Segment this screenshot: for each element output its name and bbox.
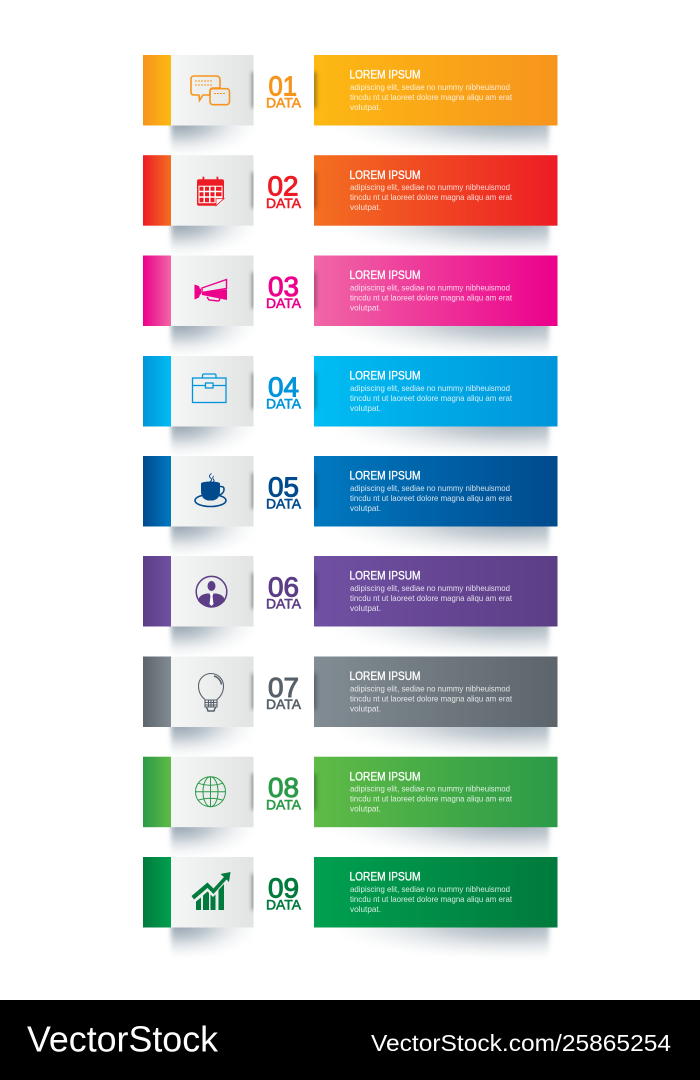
body text xyxy=(350,784,513,814)
row 07 xyxy=(143,656,558,758)
text banner xyxy=(312,757,558,827)
colour tab xyxy=(143,857,171,928)
label DATA: DATA xyxy=(266,496,302,512)
body text: adipiscing elit, sediae no nummy nibheuismod xyxy=(350,82,510,92)
row 03 xyxy=(143,256,558,356)
left card shadow xyxy=(171,822,255,858)
footer bar xyxy=(0,1000,700,1080)
heading: LOREM IPSUM xyxy=(350,771,420,783)
icon card xyxy=(171,757,256,827)
left card shadow xyxy=(171,922,255,958)
body text xyxy=(350,282,513,312)
row 09 xyxy=(143,857,558,958)
left card shadow xyxy=(171,320,255,356)
colour tab xyxy=(143,155,171,226)
body text: adipiscing elit, sediae no nummy nibheuismod xyxy=(350,483,510,493)
right banner shadow xyxy=(330,120,549,156)
body text xyxy=(350,383,513,413)
colour tab xyxy=(143,456,171,526)
body text xyxy=(350,82,513,112)
colour tab xyxy=(143,256,171,326)
number 09: 09 xyxy=(268,872,299,904)
row 02 xyxy=(143,155,558,256)
left card shadow xyxy=(171,521,255,557)
heading: LOREM IPSUM xyxy=(350,270,420,282)
heading: LOREM IPSUM xyxy=(350,371,420,383)
icon: megaphone xyxy=(194,280,227,301)
label DATA: DATA xyxy=(266,796,302,812)
label DATA: DATA xyxy=(266,95,302,111)
text banner xyxy=(312,556,558,626)
icon card xyxy=(171,656,256,727)
colour tab xyxy=(143,55,171,126)
icon: calendar xyxy=(197,177,224,206)
label DATA: DATA xyxy=(266,295,302,311)
heading: LOREM IPSUM xyxy=(350,471,420,483)
number 01: 01 xyxy=(268,70,297,102)
body text: volutpat. xyxy=(350,403,381,413)
number 08: 08 xyxy=(268,772,299,803)
label DATA: DATA xyxy=(266,897,302,913)
footer logo text: VectorStock xyxy=(27,1018,219,1060)
body text: adipiscing elit, sediae no nummy nibheuismod xyxy=(350,182,510,192)
row 08 xyxy=(143,757,558,858)
icon card xyxy=(171,556,256,626)
body text: tincdu nt ut laoreet dolore magna aliqu am erat xyxy=(350,393,513,403)
icon: briefcase xyxy=(192,374,226,402)
icon: growth chart xyxy=(192,872,230,910)
left card shadow xyxy=(171,621,255,657)
body text: adipiscing elit, sediae no nummy nibheuismod xyxy=(350,383,510,393)
icon card xyxy=(171,256,256,326)
body text: adipiscing elit, sediae no nummy nibheuismod xyxy=(350,583,510,593)
body text: volutpat. xyxy=(350,704,381,714)
number 03: 03 xyxy=(268,271,299,302)
number 06: 06 xyxy=(268,572,299,602)
body text xyxy=(350,884,513,914)
body text xyxy=(350,182,513,212)
body text: tincdu nt ut laoreet dolore magna aliqu am erat xyxy=(350,894,513,904)
icon card xyxy=(171,55,256,126)
number 05: 05 xyxy=(268,472,299,502)
footer image id: VectorStock.com/25865254 xyxy=(371,1030,671,1056)
body text: volutpat. xyxy=(350,302,381,312)
text banner xyxy=(312,256,558,326)
body text xyxy=(350,684,513,714)
left card shadow xyxy=(171,120,255,156)
label DATA: DATA xyxy=(266,696,302,712)
text banner xyxy=(312,456,558,526)
body text: adipiscing elit, sediae no nummy nibheuismod xyxy=(350,684,510,694)
heading: LOREM IPSUM xyxy=(350,571,420,583)
body text: tincdu nt ut laoreet dolore magna aliqu am erat xyxy=(350,694,513,704)
right banner shadow xyxy=(330,722,549,758)
heading: LOREM IPSUM xyxy=(350,70,420,82)
number 04: 04 xyxy=(268,372,299,402)
body text: adipiscing elit, sediae no nummy nibheuismod xyxy=(350,884,510,894)
right banner shadow xyxy=(330,922,549,958)
icon card xyxy=(171,356,256,426)
body text: tincdu nt ut laoreet dolore magna aliqu am erat xyxy=(350,92,513,102)
colour tab xyxy=(143,356,171,426)
right banner shadow xyxy=(330,220,549,256)
heading: LOREM IPSUM xyxy=(350,872,420,884)
icon: light bulb xyxy=(198,674,224,711)
right banner shadow xyxy=(330,822,549,858)
icon: coffee cup xyxy=(195,474,226,506)
row 05 xyxy=(143,456,558,557)
body text xyxy=(350,583,513,613)
number 02: 02 xyxy=(268,171,298,202)
text banner xyxy=(312,356,558,426)
colour tab xyxy=(143,656,171,727)
icon card xyxy=(171,155,256,226)
right banner shadow xyxy=(330,621,549,657)
text banner xyxy=(312,656,558,727)
body text xyxy=(350,483,513,513)
icon: globe xyxy=(196,777,226,807)
text banner xyxy=(312,55,558,126)
left card shadow xyxy=(171,722,255,758)
body text: tincdu nt ut laoreet dolore magna aliqu am erat xyxy=(350,192,513,202)
icon card xyxy=(171,456,256,526)
left card shadow xyxy=(171,220,255,256)
body text: tincdu nt ut laoreet dolore magna aliqu am erat xyxy=(350,794,513,804)
icon card xyxy=(171,857,256,928)
body text: volutpat. xyxy=(350,102,381,112)
body text: volutpat. xyxy=(350,603,381,613)
colour tab xyxy=(143,556,171,626)
right banner shadow xyxy=(330,320,549,356)
body text: tincdu nt ut laoreet dolore magna aliqu am erat xyxy=(350,292,513,302)
body text: volutpat. xyxy=(350,804,381,814)
body text: volutpat. xyxy=(350,503,381,513)
text banner xyxy=(312,155,558,226)
heading: LOREM IPSUM xyxy=(350,671,420,683)
label DATA: DATA xyxy=(266,596,302,612)
icon: businessman portrait xyxy=(196,576,227,607)
row 01 xyxy=(143,55,558,156)
body text: tincdu nt ut laoreet dolore magna aliqu am erat xyxy=(350,593,513,603)
row 04 xyxy=(143,356,558,457)
left card shadow xyxy=(171,421,255,457)
label DATA: DATA xyxy=(266,396,302,412)
heading: LOREM IPSUM xyxy=(350,170,420,182)
icon: chat bubbles xyxy=(191,76,230,105)
number 07: 07 xyxy=(268,672,299,703)
body text: adipiscing elit, sediae no nummy nibheuismod xyxy=(350,784,510,794)
colour tab xyxy=(143,757,171,827)
body text: tincdu nt ut laoreet dolore magna aliqu am erat xyxy=(350,493,513,503)
text banner xyxy=(314,857,558,928)
right banner shadow xyxy=(330,421,549,457)
body text: volutpat. xyxy=(350,202,381,212)
label DATA: DATA xyxy=(266,195,302,211)
body text: adipiscing elit, sediae no nummy nibheuismod xyxy=(350,282,510,292)
right banner shadow xyxy=(330,521,549,557)
row 06 xyxy=(143,556,558,657)
body text: volutpat. xyxy=(350,904,381,914)
